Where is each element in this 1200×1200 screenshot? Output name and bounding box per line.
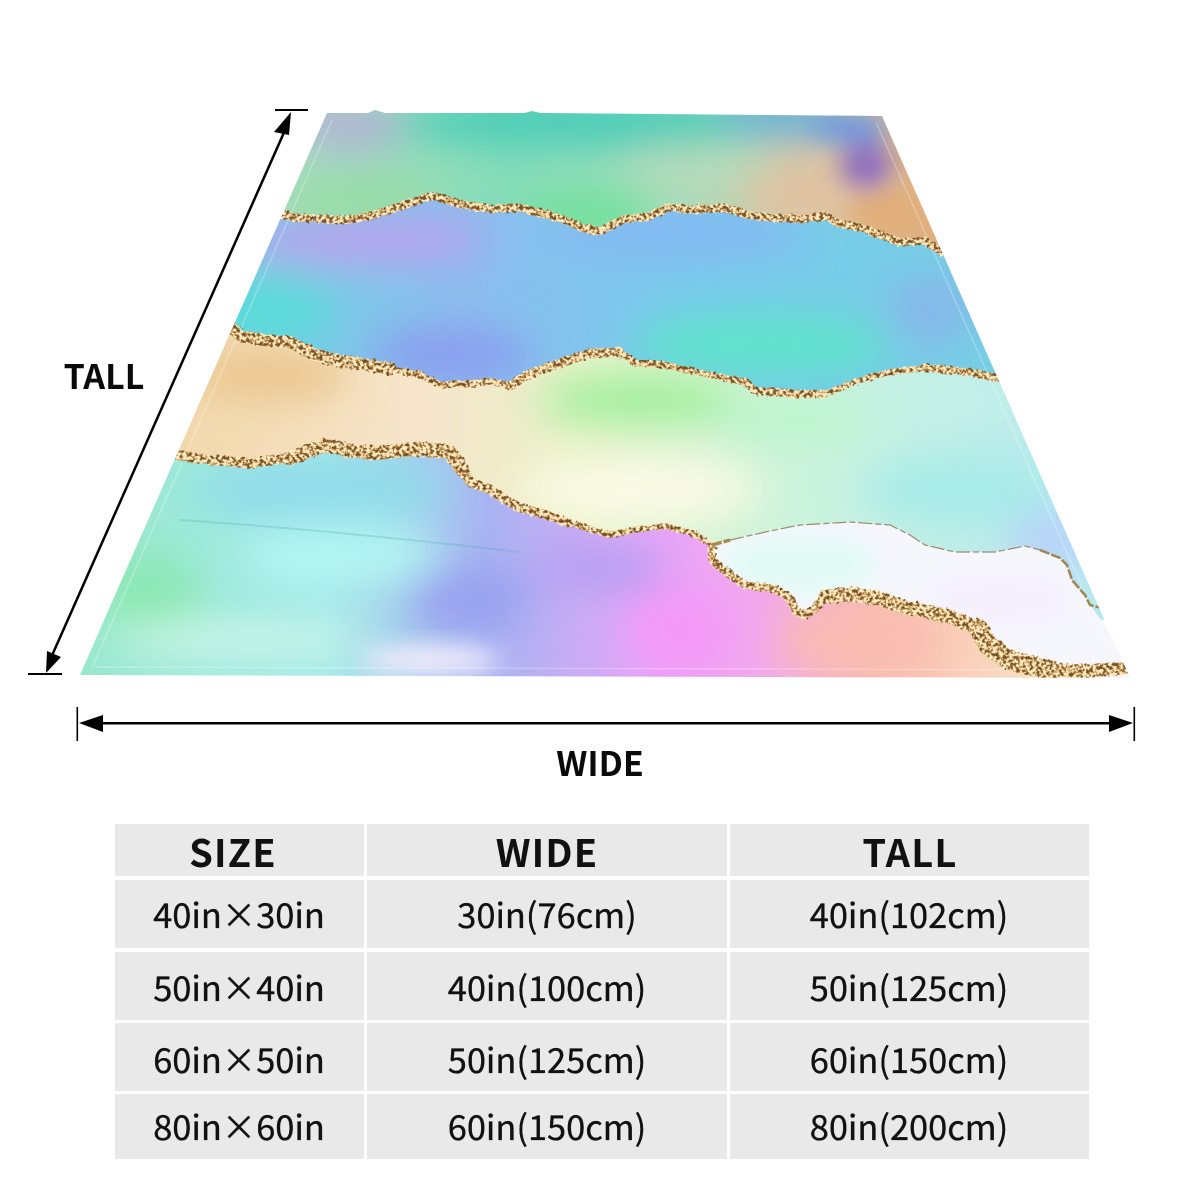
- band: white marble: [714, 522, 1130, 678]
- fold line: [180, 520, 520, 552]
- table row 60x50: [115, 1023, 1089, 1091]
- thin gold vein: [712, 522, 1102, 608]
- arrow: tall dimension: [28, 109, 308, 675]
- table row 80x60: 80in×60in: [153, 1100, 325, 1150]
- gold vein 2: [232, 328, 997, 394]
- table header row: WIDE: [496, 823, 598, 878]
- table row 50x40: 40in(100cm): [448, 961, 646, 1011]
- stitching hem: [92, 120, 1118, 670]
- table row 40x30: [115, 880, 1089, 948]
- table row 40x30: 40in(102cm): [810, 888, 1008, 938]
- band: top teal and orange: [258, 110, 950, 270]
- table header row: SIZE: [189, 823, 277, 878]
- gold vein 1: [280, 196, 942, 252]
- band: aqua to pink: [80, 452, 1083, 678]
- band: blue and aqua: [196, 200, 1012, 410]
- table row 80x60: 60in(150cm): [448, 1100, 646, 1150]
- label: wide: WIDE: [556, 737, 644, 786]
- table row 40x30: 40in×30in: [153, 888, 325, 938]
- table row 60x50: 60in×50in: [153, 1033, 325, 1083]
- table row 50x40: 50in(125cm): [810, 961, 1008, 1011]
- size table: [115, 823, 1089, 1159]
- gold vein 3: [177, 445, 1128, 671]
- table row 60x50: 60in(150cm): [810, 1033, 1008, 1083]
- table row 60x50: 50in(125cm): [448, 1033, 646, 1083]
- table row 50x40: [115, 952, 1089, 1020]
- table row 80x60: 80in(200cm): [810, 1100, 1008, 1150]
- table header row: [115, 823, 1089, 878]
- table header row: TALL: [862, 823, 958, 878]
- label: tall: TALL: [64, 350, 144, 399]
- band: cream and green: [104, 326, 1104, 620]
- table row 40x30: 30in(76cm): [457, 888, 637, 938]
- arrow: wide dimension: [76, 707, 1135, 741]
- table row 50x40: 50in×40in: [153, 961, 325, 1011]
- blanket: [60, 93, 1150, 700]
- table row 80x60: [115, 1094, 1089, 1159]
